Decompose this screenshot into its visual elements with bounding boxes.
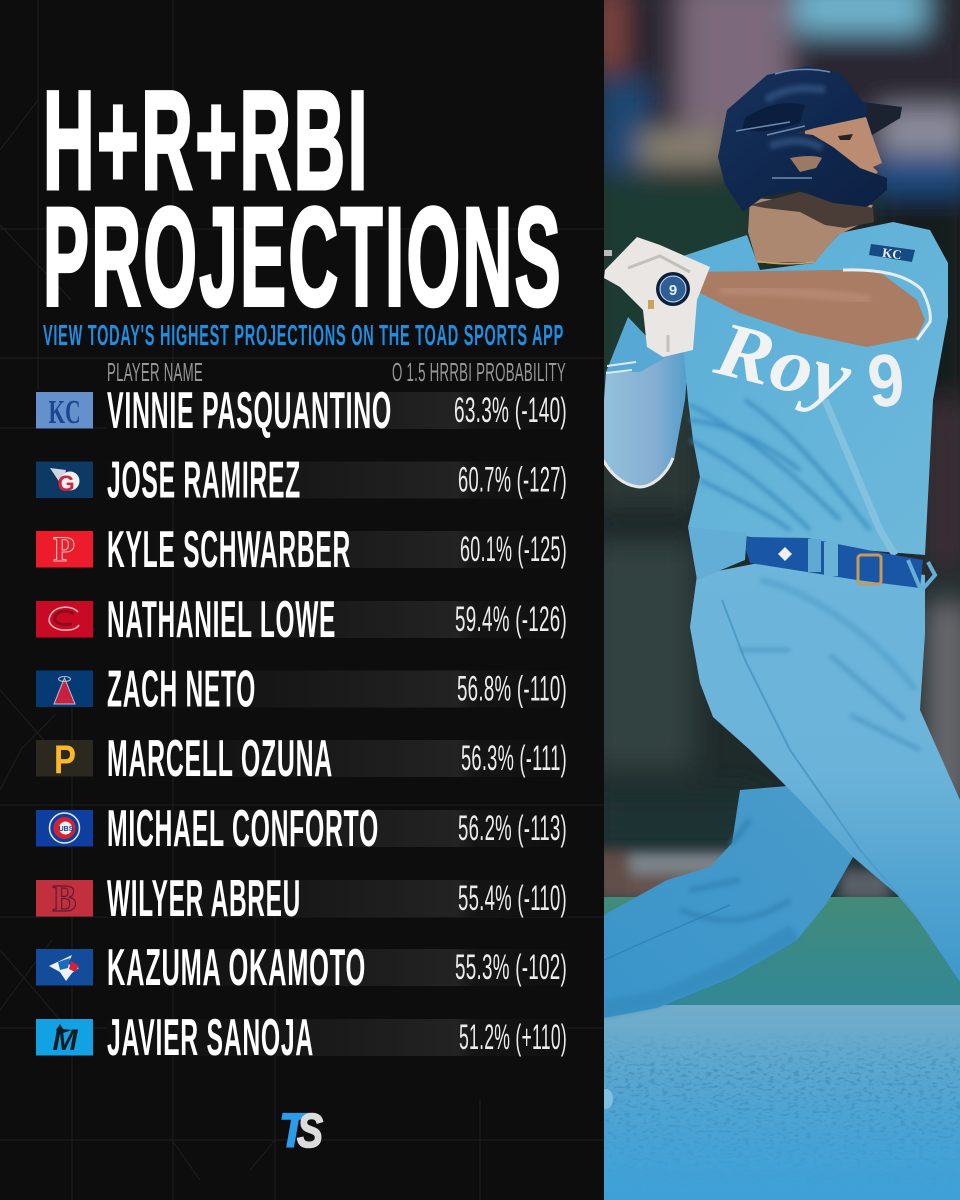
icon: Cubs logo: UBS [59, 826, 74, 833]
outfield grass [604, 897, 960, 1007]
row: Vinnie Pasquantino [36, 382, 567, 440]
projection value: 56.8% (-110) [457, 670, 567, 708]
row: Kazuma Okamoto: KAZUMA OKAMOTO [107, 939, 366, 997]
shoulder patch [869, 244, 915, 262]
jersey [660, 222, 948, 580]
title: H+R+RBI [43, 62, 370, 218]
row: Jose Ramirez: JOSE RAMIREZ [107, 452, 301, 510]
sleeve cuff [843, 270, 930, 340]
projection value: 56.3% (-111) [461, 739, 567, 778]
row: Nathaniel Lowe: NATHANIEL LOWE [107, 591, 336, 649]
icon: Royals logo: KC [48, 394, 80, 431]
belt [746, 537, 935, 590]
icon: Pirates logo: P [54, 738, 76, 782]
neck and beard [748, 192, 874, 264]
batting gloves [604, 237, 710, 357]
icon: Toad Sports logo [279, 1105, 323, 1158]
icon: Cubs logo [36, 810, 93, 846]
projection value: 60.1% (-125) [460, 530, 567, 569]
jersey number: 9 [864, 337, 908, 424]
row: Marcell Ozuna: MARCELL OZUNA [107, 730, 333, 788]
projection value: 55.3% (-102) [455, 948, 567, 987]
column heading: probability: O 1.5 HRRBI PROBABILITY [392, 357, 566, 387]
title [43, 62, 563, 335]
shoulder patch: KC [881, 245, 903, 262]
icon: Marlins logo [36, 1019, 93, 1057]
bat knob [656, 272, 690, 306]
baseball on the dirt [604, 1089, 613, 1109]
panel: player photo [590, 0, 960, 1200]
rear arm sleeve [603, 317, 690, 487]
face [805, 117, 882, 174]
projection value: 59.4% (-126) [455, 600, 567, 639]
forearm [700, 270, 925, 347]
icon: Reds logo [36, 601, 93, 638]
jersey script: Roy [707, 304, 860, 421]
projection value: 51.2% (+110) [459, 1018, 567, 1057]
icon: Phillies logo [36, 529, 93, 569]
icon: Toad Sports logo: T [279, 1105, 309, 1158]
projection value: 56.2% (-113) [458, 809, 567, 848]
bat knob: 9 [669, 282, 677, 299]
batting helmet [718, 66, 902, 212]
column heading: player name: PLAYER NAME [107, 357, 203, 387]
icon: Toad Sports logo: S [297, 1105, 323, 1158]
row: Zach Neto [36, 660, 567, 718]
pants and legs [604, 555, 960, 1018]
infield dirt [604, 1005, 960, 1200]
icon: Blue Jays logo [36, 949, 93, 986]
row: Vinnie Pasquantino: VINNIE PASQUANTINO [107, 382, 392, 440]
bottom blue wash [604, 870, 960, 1200]
icon: Guardians logo [36, 462, 93, 498]
row: Wilyer Abreu: WILYER ABREU [107, 870, 301, 928]
projection value: 60.7% (-127) [458, 460, 567, 500]
row: Zach Neto: ZACH NETO [107, 660, 256, 718]
icon: Red Sox logo [36, 878, 93, 920]
row: Kyle Schwarber: KYLE SCHWARBER [107, 521, 351, 579]
icon: Marlins logo: M [52, 1024, 78, 1057]
row: Javier Sanoja: JAVIER SANOJA [107, 1009, 314, 1067]
projection value: 55.4% (-110) [458, 879, 567, 918]
icon: Guardians logo: G [57, 471, 75, 496]
icon: Royals logo [36, 392, 93, 431]
row: Michael Conforto: MICHAEL CONFORTO [107, 800, 379, 858]
icon: Phillies logo: P [53, 529, 75, 569]
icon: Angels logo [36, 670, 93, 707]
icon: Pirates logo [36, 738, 93, 782]
icon: Red Sox logo: B [52, 878, 76, 920]
projection value: 63.3% (-140) [454, 391, 567, 430]
